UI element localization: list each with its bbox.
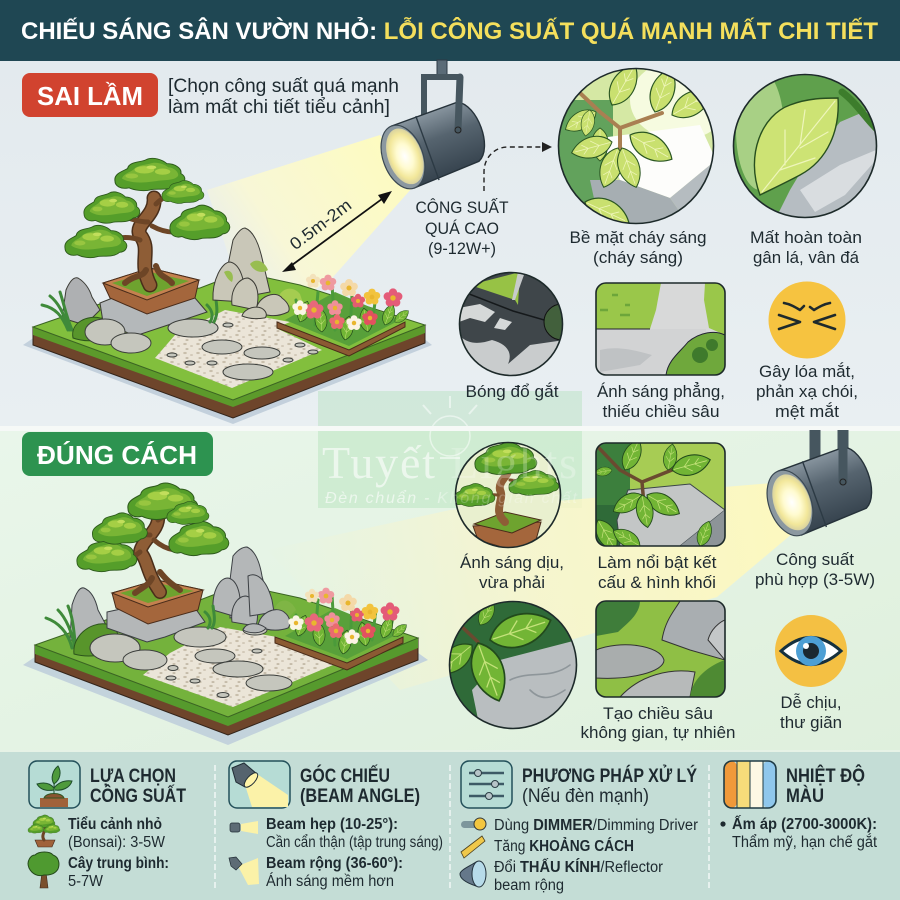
caption: depth — [580, 704, 736, 742]
caption: burned surface: (cháy sáng) — [593, 248, 683, 267]
caption: gentle light: Ánh sáng dịu, — [460, 553, 564, 572]
caption: shape and texture — [598, 553, 717, 592]
heading: GÓC CHIẾU — [300, 765, 390, 787]
caption: flat light: Ánh sáng phẳng, — [597, 382, 725, 401]
caption: glare: phản xạ chói, — [756, 382, 858, 401]
text: narrow beam: Beam hẹp (10-25°): — [266, 816, 398, 833]
caption: glare: Gây lóa mắt, — [759, 362, 855, 381]
bullet text: warm colour: Thẩm mỹ, hạn chế gắt — [732, 834, 878, 851]
detail: lost leaf veins — [733, 70, 880, 220]
caption: depth: Tạo chiều sâu — [603, 704, 713, 723]
panel: technical tips — [0, 750, 900, 900]
heading: CÔNG SUẤT — [90, 785, 186, 807]
watermark text: Đèn chuẩn - Không gian chất — [325, 489, 578, 507]
icon: sliders — [461, 761, 512, 808]
text: narrow beam: Cần cẩn thận (tập trung sáng) — [266, 834, 443, 851]
bullet text: warm colour — [720, 816, 878, 851]
detail: leaf veins visible — [448, 600, 578, 730]
detail: harsh shadow — [458, 272, 564, 376]
heading: NHIỆT ĐỘ — [786, 765, 865, 787]
icon: relaxed eye — [775, 615, 847, 687]
bullet text: warm colour: Ấm áp (2700-3000K): — [732, 816, 877, 833]
icon: beam lamp — [229, 761, 290, 808]
illustration: garden with soft light — [23, 483, 428, 745]
column: beam angle — [229, 761, 443, 890]
caption: gentle light — [460, 553, 564, 592]
text: small landscape: (Bonsai): 3-5W — [68, 834, 165, 851]
caption: comfortable: thư giãn — [780, 713, 842, 732]
heading: LỰA CHỌN — [90, 766, 176, 787]
heading — [90, 766, 186, 807]
heading: (BEAM ANGLE) — [300, 786, 420, 807]
icon: wide beam — [229, 857, 259, 885]
icon: seedling — [29, 761, 80, 808]
caption: burned surface: Bề mặt cháy sáng — [570, 228, 706, 247]
caption: suitable power: Công suất — [776, 550, 854, 569]
icon: ruler — [461, 836, 485, 858]
icon: narrow beam — [230, 821, 258, 834]
bonsai tree — [77, 483, 229, 593]
caption: shape and texture: cấu & hình khối — [598, 573, 716, 592]
text: mistake description: làm mất chi tiết tiểu cảnh] — [168, 97, 390, 118]
heading: MÀU — [786, 785, 824, 807]
text: small landscape: Tiểu cảnh nhỏ — [68, 816, 162, 833]
text: narrow beam — [266, 816, 443, 851]
label: high wattage: (9-12W+) — [428, 239, 496, 258]
dashed arrow to detail — [484, 142, 552, 191]
header bar — [0, 0, 900, 61]
rock group — [213, 228, 304, 319]
bonsai pot — [103, 268, 199, 314]
caption: glare: mệt mắt — [775, 402, 839, 421]
heading: (Nếu đèn mạnh) — [522, 786, 649, 807]
text: dimmer: Dùng DIMMER/Dimming Driver — [494, 817, 698, 834]
panel: mistake section background — [0, 60, 900, 426]
caption: lost veins — [750, 228, 862, 267]
detail: flat light — [596, 283, 725, 375]
column: colour temperature — [720, 761, 878, 851]
caption: suitable power: phù hợp (3-5W) — [755, 570, 875, 589]
caption: suitable power — [755, 550, 875, 589]
icon: small bonsai — [28, 815, 60, 847]
badge: ĐÚNG CÁCH: ĐÚNG CÁCH — [37, 440, 197, 470]
text: wide beam: Ánh sáng mềm hơn — [266, 873, 394, 890]
spotlight: high power — [373, 60, 493, 196]
bonsai pot — [112, 580, 203, 624]
heading — [786, 765, 865, 807]
text: small landscape — [68, 816, 165, 851]
caption: glare — [756, 362, 858, 421]
caption: gentle light: vừa phải — [479, 573, 545, 592]
column: handling methods — [460, 761, 698, 894]
text: medium tree: Cây trung bình: — [68, 855, 169, 872]
text: lens: Đổi THẤU KÍNH/Reflector — [494, 859, 663, 876]
rock group — [205, 547, 296, 633]
icon: medium tree — [28, 852, 59, 888]
caption: lost veins: Mất hoàn toàn — [750, 228, 862, 247]
badge: SAI LẦM — [22, 73, 158, 117]
caption: comfortable — [780, 693, 842, 732]
badge: ĐÚNG CÁCH — [22, 432, 213, 476]
label: high wattage: QUÁ CAO — [425, 219, 499, 238]
text: medium tree: 5-7W — [68, 873, 103, 890]
bonsai tree — [65, 158, 230, 285]
light beam: suitable — [267, 483, 793, 690]
text: mistake description — [168, 76, 399, 118]
detail: burned surface — [558, 68, 714, 224]
text: wide beam: Beam rộng (36-60°): — [266, 855, 403, 872]
label: high wattage — [416, 198, 508, 258]
text: medium tree — [68, 855, 169, 890]
light beam: too strong — [207, 135, 412, 300]
distance arrow: 0.5m-2m: 0.5m-2m — [286, 195, 355, 254]
caption: shape and texture: Làm nổi bật kết — [598, 553, 717, 572]
caption: harsh shadow: Bóng đổ gắt — [466, 382, 559, 401]
text: lens — [494, 859, 663, 894]
badge: SAI LẦM: SAI LẦM — [37, 81, 143, 111]
text: wide beam — [266, 855, 403, 890]
text: lens: beam rộng — [494, 877, 564, 894]
icon: lens — [460, 861, 486, 887]
caption: comfortable: Dễ chịu, — [780, 693, 842, 712]
caption: flat light — [597, 382, 725, 421]
caption: burned surface — [570, 228, 706, 267]
watermark panel — [318, 391, 582, 508]
text: mistake description: [Chọn công suất quá mạnh — [168, 76, 399, 97]
flower bed — [277, 274, 411, 356]
caption: depth: không gian, tự nhiên — [580, 723, 736, 742]
heading — [300, 765, 420, 807]
flower bed — [275, 588, 409, 670]
detail: spatial depth — [596, 601, 725, 697]
icon: colour stripes — [724, 761, 776, 808]
text: distance: Tăng KHOẢNG CÁCH — [494, 838, 634, 855]
icon: dimmer — [461, 818, 486, 830]
detail: soft lit bonsai — [453, 442, 561, 550]
heading: PHƯƠNG PHÁP XỬ LÝ — [522, 765, 697, 787]
distance arrow: 0.5m-2m — [282, 191, 392, 272]
detail: texture highlighted — [595, 442, 726, 547]
illustration: garden with harsh light — [23, 158, 432, 424]
caption: lost veins: gân lá, vân đá — [753, 248, 860, 267]
panel: correct section background — [0, 431, 900, 753]
heading — [522, 765, 697, 807]
spotlight: right power — [758, 430, 880, 543]
icon: squinting face — [768, 282, 846, 358]
label: high wattage: CÔNG SUẤT — [416, 198, 508, 217]
watermark text: Tuyết Lights — [322, 437, 577, 488]
column: choose wattage — [28, 761, 186, 890]
title: CHIẾU SÁNG SÂN VƯỜN NHỎ: LỖI CÔNG SUẤT QUÁ MẠNH MẤT CHI TIẾT — [21, 16, 878, 45]
caption: flat light: thiếu chiều sâu — [602, 402, 720, 421]
